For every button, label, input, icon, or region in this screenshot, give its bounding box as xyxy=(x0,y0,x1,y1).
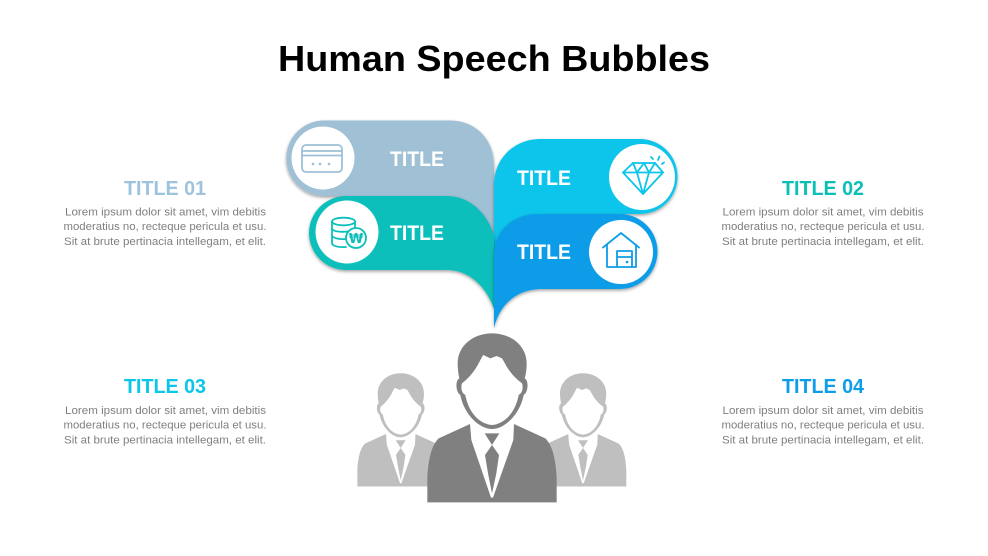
text block: title 01: TITLE 01 xyxy=(124,178,206,200)
text block: title 04: Lorem ipsum dolor sit amet, vim debitis xyxy=(722,405,924,417)
text block: title 02: TITLE 02 xyxy=(782,178,864,200)
text block: title 04: Sit at brute pertinacia intellegam, et elit. xyxy=(722,434,924,446)
text block: title 02: Lorem ipsum dolor sit amet, vim debitis xyxy=(722,206,924,218)
text block: title 03: TITLE 03 xyxy=(124,376,206,398)
speech bubble: cyan xyxy=(494,139,678,262)
speech bubble: teal: ₩ xyxy=(349,232,364,247)
text block: title 04 xyxy=(722,376,924,446)
speech bubble: cyan: TITLE xyxy=(517,167,571,190)
text block: title 01: moderatius no, recteque pericula et usu. xyxy=(64,221,266,233)
text block: title 04: moderatius no, recteque pericula et usu. xyxy=(722,420,924,432)
text block: title 01 xyxy=(64,178,267,248)
text block: title 03: Lorem ipsum dolor sit amet, vim debitis xyxy=(65,405,267,417)
text block: title 02: moderatius no, recteque pericula et usu. xyxy=(722,221,924,233)
speech bubble: blue xyxy=(494,214,658,328)
speech bubble: teal xyxy=(309,196,494,309)
text block: title 01: Lorem ipsum dolor sit amet, vim debitis xyxy=(65,206,267,218)
speech bubble: blue: TITLE xyxy=(517,241,571,264)
person: centre, dark grey xyxy=(427,333,557,502)
text block: title 03 xyxy=(64,376,267,446)
speech bubble: steel blue xyxy=(286,120,494,260)
person: right, light grey xyxy=(540,373,626,486)
speech bubble: steel blue: TITLE xyxy=(390,148,444,171)
text block: title 03: moderatius no, recteque pericula et usu. xyxy=(64,420,266,432)
person: left, light grey xyxy=(357,373,444,486)
text block: title 01: Sit at brute pertinacia intellegam, et elit. xyxy=(64,236,266,248)
text block: title 04: TITLE 04 xyxy=(782,376,865,398)
text block: title 03: Sit at brute pertinacia intellegam, et elit. xyxy=(64,434,266,446)
title: Human Speech Bubbles xyxy=(278,38,710,79)
text block: title 02: Sit at brute pertinacia intellegam, et elit. xyxy=(722,236,924,248)
text block: title 02 xyxy=(722,178,924,248)
speech bubble: teal: TITLE xyxy=(390,222,444,245)
